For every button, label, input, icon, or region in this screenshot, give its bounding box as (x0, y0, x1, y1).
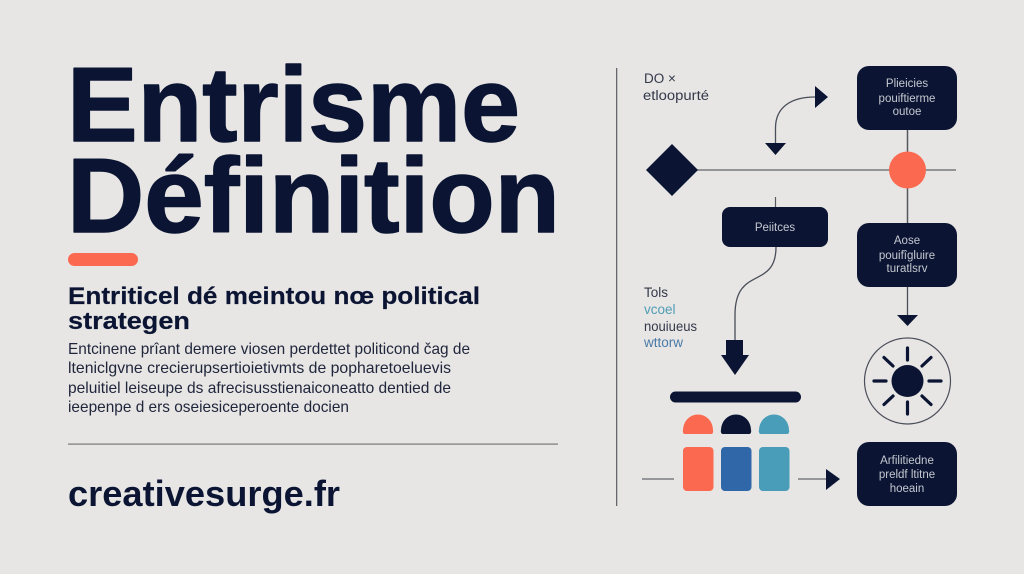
side label list: nouiuеus (644, 319, 697, 334)
box: top right (857, 66, 957, 130)
side label list: Tols (644, 285, 668, 300)
icon: navy and blue column (721, 414, 752, 491)
box: bottom right (857, 442, 957, 506)
arrow: curved to big arrowhead (721, 247, 776, 375)
top bar (670, 392, 801, 402)
side label list: wttorw (643, 335, 683, 350)
icon: coral circle (889, 152, 926, 188)
side label list: vcoel (644, 302, 676, 317)
body text (68, 341, 470, 416)
body text: ieepenpe d ers oseiesiceperoente docien (68, 399, 349, 416)
box: top right: Plieicies (886, 78, 928, 90)
body text: Entcinene prîant demere viosen perdettet politicond čag de (68, 341, 470, 358)
icon: diamond (646, 144, 698, 196)
connector: horizontal line (690, 169, 956, 171)
icon: sun in circle (864, 338, 950, 424)
title: Définition (67, 137, 560, 255)
subheading (68, 283, 480, 335)
subheading: Entriticel dé meintou nœ political (68, 283, 480, 310)
body text: peluitiel leiseupe ds afrecisusstienaiconeatto dentied de (68, 380, 451, 397)
subheading: strategen (68, 308, 190, 335)
website: creativesurge.fr (68, 473, 340, 514)
title (67, 46, 560, 255)
connector: vertical line (906, 125, 908, 228)
title: Entrisme (67, 46, 520, 164)
connector above middle box (774, 197, 776, 208)
box: right middle: turatlsrv (887, 263, 928, 275)
icon: coral column (683, 414, 714, 491)
vertical divider (616, 68, 617, 506)
arrow: to bottom box (798, 469, 840, 490)
accent bar (68, 253, 138, 266)
box: bottom right: preldf ltitne (879, 469, 935, 481)
arrow: curved double-headed (765, 86, 828, 155)
box: bottom right: hoeain (890, 483, 924, 495)
small label top: etloopurté (643, 88, 709, 103)
small label top: DO × (644, 71, 676, 86)
box: right middle: pouifîgluire (879, 250, 935, 262)
box: middle (722, 207, 828, 247)
box: middle: Peiitces (755, 222, 795, 234)
box: right middle: Aose (894, 235, 920, 247)
box: top right: pouiftierme (879, 93, 935, 105)
box: bottom right: Arfilitiedne (880, 455, 934, 467)
arrow: down to sun icon (897, 287, 918, 326)
side label list (643, 285, 697, 350)
box: top right: outoe (893, 106, 921, 118)
small label top (643, 71, 709, 103)
body text: lteniclgvne crecierupsertioietivmts de popharetoeluevis (68, 360, 451, 377)
icon: teal column (759, 414, 790, 491)
input line (642, 478, 674, 480)
box: right middle (857, 223, 957, 287)
divider (68, 444, 558, 445)
